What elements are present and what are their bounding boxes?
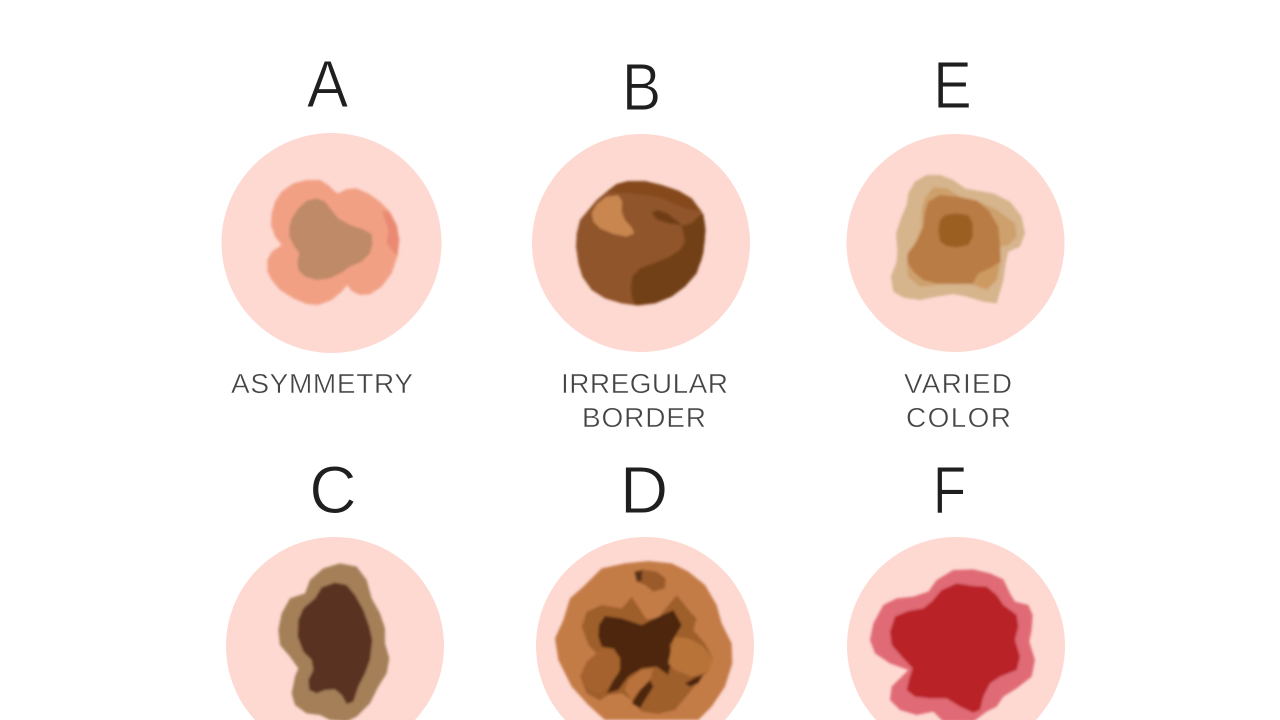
heading: C: C [309,453,357,528]
lesion: C [278,563,389,720]
panel: A asymmetry [222,46,442,399]
lesion: asymmetry [267,180,399,305]
panel: E varied color [846,48,1064,433]
panel: B irregular border: BORDER [582,402,706,433]
label: varied color: VARIED [904,368,1012,399]
skin circle B [532,134,750,352]
lesion: irregular border [576,181,706,306]
skin circle C [226,537,444,720]
label: irregular border: IRREGULAR [561,368,728,399]
heading: B: B [622,51,661,125]
skin circle E [846,134,1064,352]
skin circle D [536,537,754,720]
panel: E varied color: COLOR [906,402,1011,433]
panel: F [847,453,1065,720]
skin circle A [222,133,442,353]
lesion: F [870,569,1035,720]
heading: F: F [933,453,966,527]
heading: A: A [307,46,349,121]
label: asymmetry: ASYMMETRY [231,368,413,399]
lesion: varied color [891,175,1025,303]
heading: D: D [620,453,668,528]
heading: E: E [933,48,972,123]
panel: C [226,453,444,720]
skin circle F [847,537,1065,720]
panel: B irregular border [532,51,750,433]
panel: D [536,453,754,720]
lesion: D [555,561,732,720]
